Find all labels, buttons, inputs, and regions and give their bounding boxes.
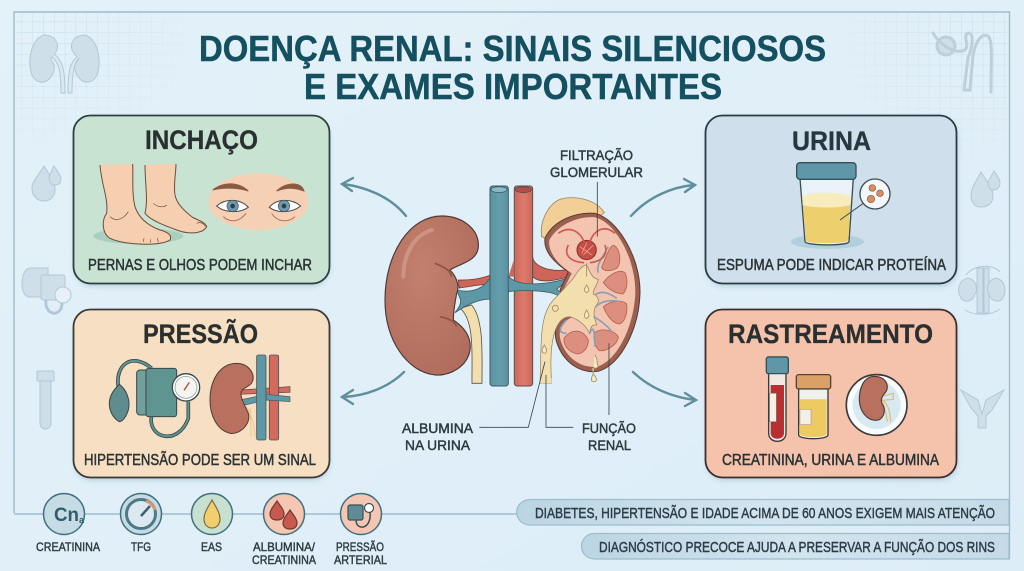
- title: DOENÇA RENAL: SINAIS SILENCIOSOS: [199, 28, 826, 69]
- vein: blue vessel: [455, 186, 580, 386]
- label: albumina na urina: [402, 421, 473, 453]
- glomerulus: [577, 240, 596, 260]
- renal pyramids: [564, 245, 627, 354]
- label: albumina na urina: NA URINA: [405, 438, 470, 453]
- panel: inchaço: [74, 116, 330, 286]
- icon: swollen feet: [93, 164, 207, 244]
- icon: blood tube: [766, 357, 788, 441]
- icon: puffy eyes: [208, 173, 308, 230]
- heading: urina: URINA: [792, 126, 871, 156]
- arrow: to inchaço: [342, 178, 406, 216]
- background icon: kidneys: [30, 35, 99, 93]
- calyces: [560, 247, 620, 347]
- label: função renal: [582, 421, 636, 453]
- label: filtração glomerular: FILTRAÇÃO: [560, 148, 633, 163]
- background icon: kidneys and vessels: [959, 266, 1005, 314]
- icon: kidney in circle: [846, 375, 907, 435]
- label: creatinina: CREATININA: [36, 540, 100, 554]
- icon: sample jar: [796, 375, 831, 439]
- icon: eas: [192, 494, 232, 534]
- icon: creatinina: [44, 494, 85, 534]
- urine drops: [542, 263, 598, 382]
- label: filtração glomerular: [550, 148, 643, 180]
- heading: pressão: PRESSÃO: [143, 318, 258, 349]
- icon: tfg: [120, 494, 162, 534]
- label: filtração glomerular: GLOMERULAR: [550, 165, 643, 180]
- caption: urina: ESPUMA PODE INDICAR PROTEÍNA: [717, 255, 946, 274]
- label line: função renal: [546, 343, 609, 427]
- background icon: drops right: [971, 171, 1000, 207]
- icon: albumina/creatinina: [264, 494, 304, 534]
- background icon: test tube: [37, 371, 54, 429]
- caption: inchaço: PERNAS E OLHOS PODEM INCHAR: [88, 257, 312, 274]
- label line: filtração glomerular: [596, 182, 599, 237]
- title: [199, 28, 826, 107]
- ureter: left: [460, 305, 482, 383]
- caption: rastreamento: CREATININA, URINA E ALBUMINA: [722, 452, 939, 469]
- background icon: ureter branches: [961, 390, 1004, 428]
- background icon: blood pressure cuff: [22, 268, 71, 313]
- label line: albumina: [479, 362, 545, 427]
- panel: pressão: [74, 310, 330, 480]
- label: função renal: FUNÇÃO: [582, 421, 636, 436]
- right kidney cross-section: [540, 213, 640, 383]
- label: eas: EAS: [201, 540, 222, 554]
- ureter: right: [540, 378, 552, 383]
- label: pressão arterial: [334, 540, 387, 567]
- arrow: to pressão: [342, 372, 404, 404]
- icon: blood pressure monitor: [109, 361, 200, 436]
- icon: creatinina: Cn: [54, 505, 79, 526]
- icon: creatinina: a: [79, 515, 85, 525]
- artery: red vessel: [458, 186, 572, 386]
- label: pressão arterial: PRESSÃO: [336, 540, 384, 554]
- icon: pressão arterial: [340, 494, 382, 534]
- background icon: nephron: [933, 33, 991, 92]
- callout: risk groups: [517, 500, 1009, 525]
- connector line: bottom icons: [14, 513, 520, 515]
- panel: rastreamento: [706, 310, 957, 480]
- renal pelvis: [540, 265, 598, 383]
- adrenal gland: [541, 198, 604, 243]
- icon: urine cup: [791, 163, 890, 249]
- label: tfg: TFG: [131, 540, 151, 554]
- central kidney diagram: [385, 182, 640, 427]
- arrow: to rastreamento: [633, 372, 696, 406]
- arrow: to urina: [631, 179, 695, 216]
- icon: kidney with vessels: [210, 355, 290, 440]
- label: pressão arterial: ARTERIAL: [334, 553, 387, 567]
- label: albumina/creatinina: ALBUMINA/: [253, 540, 316, 554]
- panel: urina: [706, 116, 957, 286]
- label: albumina na urina: ALBUMINA: [402, 421, 473, 436]
- title: E EXAMES IMPORTANTES: [304, 66, 722, 107]
- label: albumina/creatinina: [252, 540, 316, 567]
- background icon: drops left: [32, 166, 61, 201]
- left kidney: [385, 216, 478, 375]
- heading: inchaço: INCHAÇO: [145, 125, 258, 155]
- callout: early diagnosis: [582, 534, 1009, 559]
- label: função renal: RENAL: [588, 438, 631, 453]
- caption: pressão: HIPERTENSÃO PODE SER UM SINAL: [84, 449, 316, 469]
- heading: rastreamento: RASTREAMENTO: [728, 319, 933, 349]
- label: albumina/creatinina: CREATININA: [252, 553, 316, 567]
